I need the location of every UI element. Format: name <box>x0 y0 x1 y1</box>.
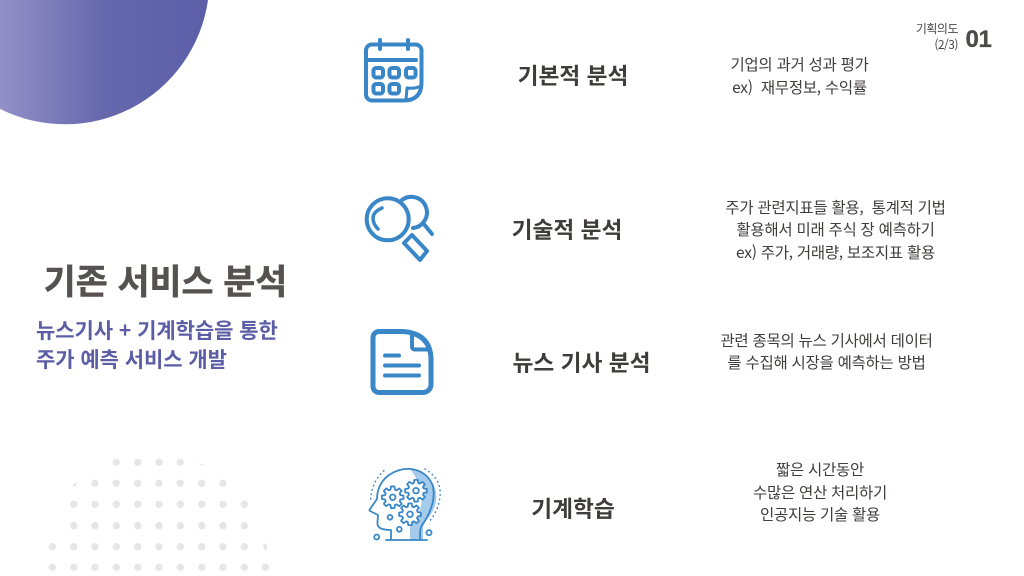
text: machine learning description: 인공지능 기술 활용 <box>760 503 880 525</box>
text: technical analysis description: ex) 주가, 거래량, 보조지표 활용 <box>736 240 935 262</box>
text: technical analysis description <box>725 196 946 262</box>
heading: machine learning: 기계학습 <box>531 491 615 524</box>
page label <box>916 20 958 52</box>
text: news analysis description: 를 수집해 시장을 예측하는 방법 <box>727 351 926 373</box>
text: machine learning description: 수많은 연산 처리하기 <box>753 480 887 502</box>
decorative quarter circle <box>0 0 208 124</box>
text: fundamental analysis description: 기업의 과거 성과 평가 <box>730 53 869 75</box>
icon: document <box>370 329 434 395</box>
heading: technical analysis: 기술적 분석 <box>512 212 622 245</box>
page number: 01 <box>966 26 992 53</box>
text: machine learning description <box>753 458 887 525</box>
icon: head with gears <box>368 468 441 541</box>
heading: fundamental analysis: 기본적 분석 <box>518 58 628 91</box>
text: fundamental analysis description <box>730 53 869 98</box>
page label: (2/3) <box>934 36 958 52</box>
text: machine learning description: 짧은 시간동안 <box>776 458 864 480</box>
subtitle: 주가 예측 서비스 개발 <box>36 344 227 374</box>
text: news analysis description: 관련 종목의 뉴스 기사에서 데이터 <box>720 328 933 350</box>
main title: 기존 서비스 분석 <box>44 254 287 304</box>
text: technical analysis description: 주가 관련지표들 활용, 통계적 기법 <box>725 196 946 218</box>
text: news analysis description <box>720 328 933 373</box>
text: technical analysis description: 활용해서 미래 주식 장 예측하기 <box>736 218 935 240</box>
heading: news article analysis: 뉴스 기사 분석 <box>513 344 650 378</box>
icon: magnifying glasses <box>364 194 434 262</box>
page label: 기획의도 <box>916 20 958 37</box>
icon: calendar <box>364 38 424 102</box>
subtitle <box>36 315 278 374</box>
dot pattern <box>48 458 269 571</box>
text: fundamental analysis description: ex) 재무정보, 수익률 <box>732 76 867 98</box>
subtitle: 뉴스기사 + 기계학습을 통한 <box>36 315 278 345</box>
